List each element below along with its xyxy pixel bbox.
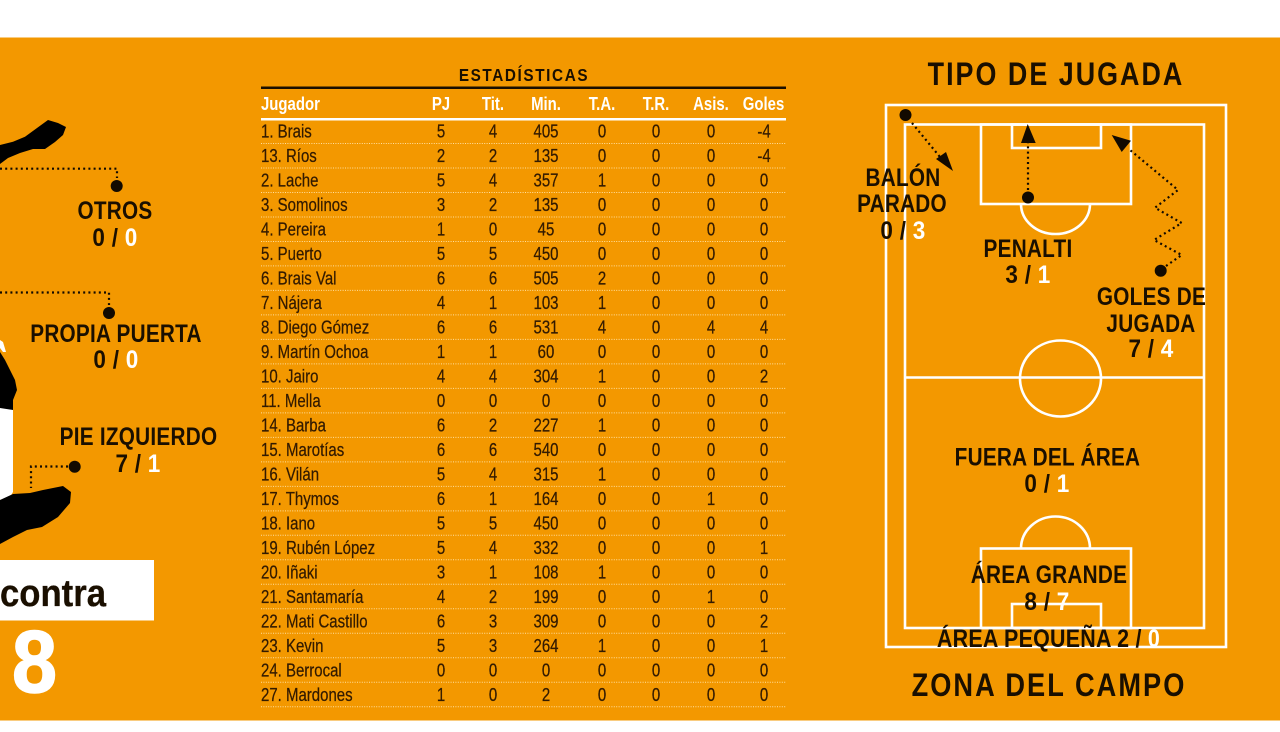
row: Mella: 0 [707, 390, 715, 411]
value: pie izquierdo: 7 / 1 [115, 450, 161, 478]
row: Puerto [261, 244, 768, 264]
row: Jairo: 304 [534, 366, 558, 387]
row: Brais: 4 [489, 121, 497, 142]
row: Brais: 0 [652, 121, 660, 142]
row: Ríos [261, 146, 771, 166]
row: Rubén López: 19. Rubén López [261, 537, 375, 558]
row: Pereira: 45 [538, 219, 554, 240]
row: Brais Val [261, 268, 768, 289]
row: Iñaki: 0 [760, 562, 768, 583]
row: Berrocal: 0 [760, 660, 768, 681]
value: área grande: 8 / 7 [1024, 588, 1070, 616]
row: Vilán: 0 [707, 464, 715, 485]
row: Vilán [261, 464, 768, 485]
row: Barba: 0 [707, 415, 715, 436]
row: Martín Ochoa: 0 [760, 341, 768, 362]
row: Nájera: 103 [534, 292, 558, 313]
row: Barba: 1 [598, 415, 606, 436]
row: Jairo: 0 [652, 366, 660, 387]
row: Somolinos: 0 [598, 195, 606, 215]
row: Mella: 11. Mella [261, 390, 321, 411]
row: Nájera: 0 [707, 292, 715, 313]
row: Mardones: 0 [489, 684, 497, 705]
row: Thymos: 0 [652, 488, 660, 509]
row: Santamaría: 21. Santamaría [261, 586, 364, 607]
row: Brais Val: 505 [534, 268, 558, 289]
row: Diego Gómez: 8. Diego Gómez [261, 317, 369, 338]
connector: pie izquierdo [31, 461, 81, 488]
label: pie izquierdo: PIE IZQUIERDO [60, 422, 217, 450]
row: Mati Castillo: 3 [489, 611, 497, 632]
row: Iñaki: 1 [598, 562, 606, 583]
row: Brais Val: 0 [707, 268, 715, 289]
row: Brais: -4 [757, 121, 771, 142]
row: Iñaki: 108 [534, 562, 558, 583]
table header row: Asis. [693, 94, 729, 114]
row: Brais: 1. Brais [261, 121, 312, 142]
value: goles de jugada: 7 / 4 [1128, 335, 1174, 363]
row: Somolinos: 3. Somolinos [261, 195, 348, 215]
label: parado: PARADO [857, 189, 947, 217]
row: Kevin [261, 635, 768, 656]
table header row: T.R. [643, 94, 669, 114]
row: Nájera: 1 [489, 292, 497, 313]
row: Kevin: 0 [707, 635, 715, 656]
row: Santamaría: 4 [437, 586, 445, 607]
value: otros: 0 / 0 [92, 224, 138, 252]
player silhouette [0, 120, 71, 544]
row: Marotías: 6 [437, 439, 445, 460]
arrow: balón parado [900, 109, 953, 171]
row: Martín Ochoa: 1 [437, 341, 445, 362]
row: Ríos: 0 [707, 146, 715, 166]
row: Mati Castillo: 6 [437, 611, 445, 632]
connector: otros [0, 169, 123, 192]
row: Vilán: 1 [598, 464, 606, 485]
row: Santamaría: 0 [598, 586, 606, 607]
row: Barba: 227 [534, 415, 558, 436]
value: balón parado: 0 / 3 [880, 217, 926, 245]
row: Thymos [261, 488, 768, 509]
row: Pereira: 0 [707, 219, 715, 240]
row: Martín Ochoa: 60 [538, 341, 554, 362]
row: Brais: 5 [437, 121, 445, 142]
row: Mella: 0 [598, 390, 606, 411]
row: Thymos: 1 [489, 488, 497, 509]
row: Brais Val: 2 [598, 268, 606, 289]
table title: ESTADÍSTICAS [459, 65, 589, 85]
row: Kevin: 1 [760, 635, 768, 656]
row: Santamaría [261, 586, 768, 607]
row: Marotías: 0 [652, 439, 660, 460]
row: Jairo [261, 366, 768, 387]
row: Rubén López: 1 [760, 537, 768, 558]
row: Mella: 0 [437, 390, 445, 411]
row: Nájera: 4 [437, 292, 445, 313]
row: Mati Castillo: 2 [760, 611, 768, 632]
row: Thymos: 17. Thymos [261, 488, 339, 509]
row: Thymos: 164 [534, 488, 558, 509]
table header row: Goles [743, 94, 784, 114]
label: balón parado: BALÓN [865, 163, 941, 191]
row: Brais Val: 6. Brais Val [261, 268, 336, 289]
row: Rubén López: 0 [652, 537, 660, 558]
row: Iano: 0 [598, 513, 606, 534]
row: Diego Gómez: 4 [707, 317, 715, 338]
row: Lache: 0 [707, 170, 715, 191]
row: Mati Castillo: 0 [652, 611, 660, 632]
row: Somolinos: 135 [534, 195, 558, 215]
row: Iano: 0 [760, 513, 768, 534]
table header row: PJ [432, 94, 450, 114]
row: Vilán: 16. Vilán [261, 464, 319, 485]
row: Berrocal: 0 [707, 660, 715, 681]
row: Nájera: 7. Nájera [261, 292, 322, 313]
row: Kevin: 264 [534, 635, 558, 656]
row: Diego Gómez: 6 [489, 317, 497, 338]
row: Puerto: 0 [598, 244, 606, 264]
label: goles de: GOLES DE [1097, 282, 1206, 310]
row: Puerto: 5 [489, 244, 497, 264]
value: propia puerta: 0 / 0 [93, 346, 139, 374]
row: Lache: 5 [437, 170, 445, 191]
row: Martín Ochoa: 0 [652, 341, 660, 362]
row: Jairo: 10. Jairo [261, 366, 318, 387]
row: Berrocal: 0 [489, 660, 497, 681]
row: Lache: 0 [760, 170, 768, 191]
row: Somolinos: 0 [652, 195, 660, 215]
row: Somolinos: 3 [437, 195, 445, 215]
row: Pereira: 0 [489, 219, 497, 240]
row: Rubén López: 5 [437, 537, 445, 558]
white box: contra [0, 560, 154, 620]
row: Lache: 4 [489, 170, 497, 191]
row: Ríos: -4 [757, 146, 771, 166]
row: Mati Castillo: 309 [534, 611, 558, 632]
white box: contra: contra [0, 573, 107, 615]
row: Nájera: 0 [652, 292, 660, 313]
row: Somolinos: 0 [760, 195, 768, 215]
connector: propia puerta [0, 292, 115, 319]
row: Somolinos: 0 [707, 195, 715, 215]
row: Iñaki: 0 [707, 562, 715, 583]
row: Iano: 0 [707, 513, 715, 534]
row: Iñaki: 0 [652, 562, 660, 583]
table header row: T.A. [589, 94, 615, 114]
row: Ríos: 0 [652, 146, 660, 166]
heading: zona del campo: ZONA DEL CAMPO [912, 668, 1186, 704]
row: Martín Ochoa: 9. Martín Ochoa [261, 341, 369, 362]
row: Barba [261, 415, 768, 436]
row: Lache [261, 170, 768, 191]
row: Marotías: 6 [489, 439, 497, 460]
label: penalti: PENALTI [984, 234, 1072, 262]
row: Mardones: 0 [598, 684, 606, 705]
row: Mardones [261, 684, 768, 705]
row: Puerto: 5. Puerto [261, 244, 322, 264]
row: Mella: 0 [542, 390, 550, 411]
row: Mardones: 0 [760, 684, 768, 705]
row: Pereira: 4. Pereira [261, 219, 327, 240]
label: propia puerta: PROPIA PUERTA [30, 319, 202, 347]
row: Pereira: 1 [437, 219, 445, 240]
row: Puerto: 0 [707, 244, 715, 264]
row: Santamaría: 0 [652, 586, 660, 607]
row: Marotías: 0 [760, 439, 768, 460]
row: Pereira [261, 219, 768, 240]
label: área pequeña: ÁREA PEQUEÑA 2 / 0 [937, 623, 1160, 652]
row: Barba: 0 [760, 415, 768, 436]
row: Mati Castillo: 0 [598, 611, 606, 632]
row: Mati Castillo: 22. Mati Castillo [261, 611, 368, 632]
row: Vilán: 0 [760, 464, 768, 485]
row: Rubén López [261, 537, 768, 558]
row: Martín Ochoa: 1 [489, 341, 497, 362]
row: Vilán: 4 [489, 464, 497, 485]
panel: player silhouette and foot stats [0, 120, 217, 711]
row: Rubén López: 4 [489, 537, 497, 558]
row: Santamaría: 0 [760, 586, 768, 607]
table header row: Min. [531, 94, 561, 114]
row: Rubén López: 332 [534, 537, 558, 558]
row: Iñaki [261, 562, 768, 583]
row: Berrocal: 0 [652, 660, 660, 681]
row: Martín Ochoa [261, 341, 768, 362]
row: Mella [261, 390, 768, 411]
row: Mella: 0 [760, 390, 768, 411]
row: Brais Val: 0 [652, 268, 660, 289]
label: área grande: ÁREA GRANDE [971, 560, 1127, 588]
row: Barba: 14. Barba [261, 415, 327, 436]
row: Lache: 2. Lache [261, 170, 318, 191]
row: Lache: 1 [598, 170, 606, 191]
row: Kevin: 3 [489, 635, 497, 656]
row: Jairo: 1 [598, 366, 606, 387]
row: Diego Gómez: 4 [598, 317, 606, 338]
row: Berrocal: 0 [598, 660, 606, 681]
label: fuera del área: FUERA DEL ÁREA [955, 443, 1140, 471]
row: Iñaki: 1 [489, 562, 497, 583]
row: Ríos: 2 [489, 146, 497, 166]
row: Pereira: 0 [652, 219, 660, 240]
row: Thymos: 0 [598, 488, 606, 509]
row: Barba: 0 [652, 415, 660, 436]
row: Diego Gómez: 0 [652, 317, 660, 338]
row: Santamaría: 1 [707, 586, 715, 607]
row: Mella: 0 [489, 390, 497, 411]
row: Ríos: 0 [598, 146, 606, 166]
panel: pitch with goal types and zones [857, 57, 1226, 704]
row: Vilán: 315 [534, 464, 558, 485]
row: Iano: 18. Iano [261, 513, 315, 534]
football pitch lines [886, 105, 1226, 647]
row: Marotías: 540 [534, 439, 558, 460]
row: Puerto: 5 [437, 244, 445, 264]
row: Ríos: 2 [437, 146, 445, 166]
row: Ríos: 13. Ríos [261, 146, 317, 166]
row: Martín Ochoa: 0 [598, 341, 606, 362]
row: Diego Gómez: 4 [760, 317, 768, 338]
row: Mardones: 27. Mardones [261, 684, 353, 705]
row: Rubén López: 0 [707, 537, 715, 558]
row: Nájera: 1 [598, 292, 606, 313]
row: Diego Gómez: 6 [437, 317, 445, 338]
row: Iano: 0 [652, 513, 660, 534]
row: Puerto: 450 [534, 244, 558, 264]
row: Jairo: 2 [760, 366, 768, 387]
row: Iñaki: 20. Iñaki [261, 562, 318, 583]
row: Marotías: 15. Marotías [261, 439, 344, 460]
row: Kevin: 0 [652, 635, 660, 656]
row: Kevin: 1 [598, 635, 606, 656]
row: Nájera [261, 292, 768, 313]
row: Pereira: 0 [598, 219, 606, 240]
row: Lache: 357 [534, 170, 558, 191]
row: Marotías: 0 [707, 439, 715, 460]
label: otros: OTROS [77, 196, 153, 224]
row: Brais Val: 0 [760, 268, 768, 289]
row: Thymos: 1 [707, 488, 715, 509]
row: Barba: 2 [489, 415, 497, 436]
row: Berrocal: 24. Berrocal [261, 660, 342, 681]
row: Kevin: 5 [437, 635, 445, 656]
row: Brais Val: 6 [437, 268, 445, 289]
row: Martín Ochoa: 0 [707, 341, 715, 362]
row: Mati Castillo [261, 611, 768, 632]
row: Vilán: 0 [652, 464, 660, 485]
row: Lache: 0 [652, 170, 660, 191]
arrow: goles de jugada [1112, 135, 1182, 277]
row: Mati Castillo: 0 [707, 611, 715, 632]
row: Thymos: 0 [760, 488, 768, 509]
row: Diego Gómez [261, 317, 768, 338]
row: Iano: 5 [489, 513, 497, 534]
row: Santamaría: 2 [489, 586, 497, 607]
row: Iano: 5 [437, 513, 445, 534]
row: Jairo: 0 [707, 366, 715, 387]
row: Mardones: 0 [652, 684, 660, 705]
row: Puerto: 0 [652, 244, 660, 264]
row: Brais: 0 [598, 121, 606, 142]
row: Somolinos [261, 195, 768, 215]
row: Thymos: 6 [437, 488, 445, 509]
row: Brais [261, 121, 771, 142]
row: Berrocal: 0 [542, 660, 550, 681]
arrow: penalti [1021, 124, 1036, 204]
row: Berrocal [261, 660, 768, 681]
row: Ríos: 135 [534, 146, 558, 166]
row: Vilán: 5 [437, 464, 445, 485]
row: Somolinos: 2 [489, 195, 497, 215]
table rows [261, 121, 771, 705]
row: Barba: 6 [437, 415, 445, 436]
row: Mardones: 2 [542, 684, 550, 705]
total goals against: 8 [12, 612, 57, 711]
table header row [261, 94, 784, 114]
row: Iano [261, 513, 768, 534]
row: Nájera: 0 [760, 292, 768, 313]
table header row: Tit. [482, 94, 504, 114]
heading: tipo de jugada: TIPO DE JUGADA [928, 57, 1184, 93]
value: fuera del área: 0 / 1 [1024, 470, 1070, 498]
label: jugada: JUGADA [1106, 309, 1196, 337]
value: penalti: 3 / 1 [1005, 261, 1051, 289]
row: Diego Gómez: 531 [534, 317, 558, 338]
row: Rubén López: 0 [598, 537, 606, 558]
row: Marotías [261, 439, 768, 460]
row: Santamaría: 199 [534, 586, 558, 607]
row: Mella: 0 [652, 390, 660, 411]
row: Puerto: 0 [760, 244, 768, 264]
row: Iñaki: 3 [437, 562, 445, 583]
table header row: Jugador [261, 94, 320, 114]
row: Mardones: 1 [437, 684, 445, 705]
row: Pereira: 0 [760, 219, 768, 240]
row: Jairo: 4 [437, 366, 445, 387]
row: Mardones: 0 [707, 684, 715, 705]
row: Brais Val: 6 [489, 268, 497, 289]
row: Jairo: 4 [489, 366, 497, 387]
panel: statistics table [261, 65, 786, 707]
row: Brais: 405 [534, 121, 558, 142]
row: Berrocal: 0 [437, 660, 445, 681]
row: Brais: 0 [707, 121, 715, 142]
row: Iano: 450 [534, 513, 558, 534]
row: Kevin: 23. Kevin [261, 635, 323, 656]
row: Marotías: 0 [598, 439, 606, 460]
